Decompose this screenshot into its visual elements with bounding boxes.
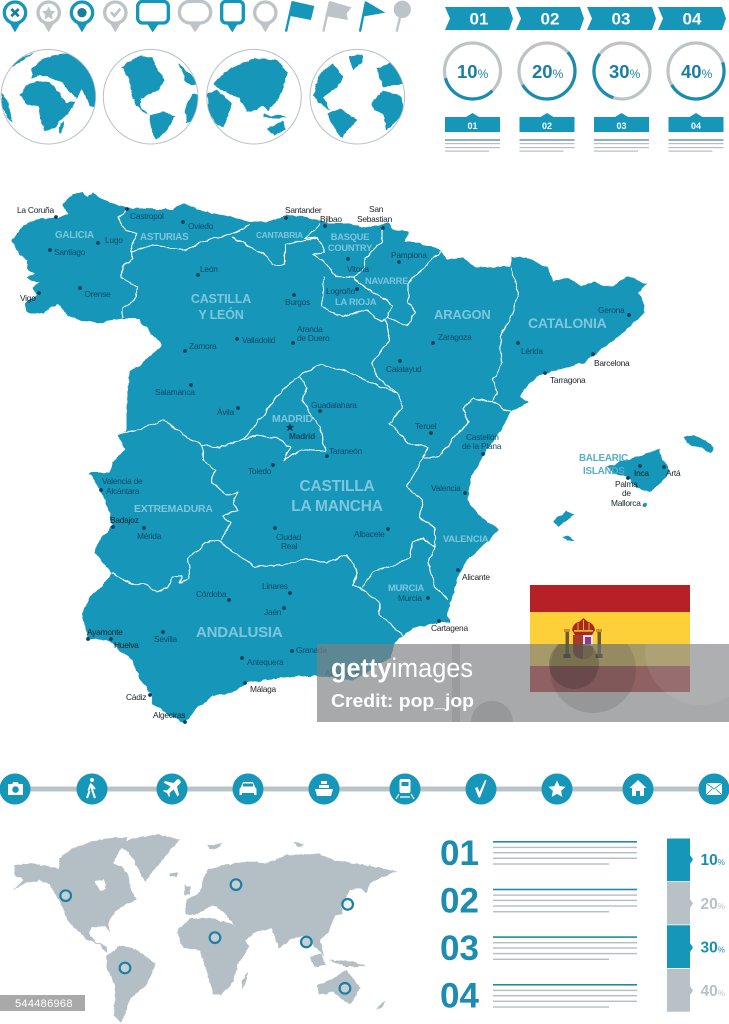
flag of Spain: [530, 585, 690, 692]
icon: grey flag: [323, 1, 352, 32]
image id tag: [0, 995, 85, 1011]
city names on land: Sevilla: [154, 634, 178, 644]
segment 30%: [667, 925, 725, 968]
region names: VALENCIA: [443, 534, 489, 544]
ring 40%: [661, 36, 729, 106]
tab 03: 03: [616, 121, 627, 131]
icon: star pin: [38, 2, 59, 32]
watermark banner: [317, 644, 729, 722]
tab 04: 04: [691, 121, 701, 131]
city names on land: Real: [281, 541, 298, 551]
city names on land: Lérida: [521, 346, 543, 356]
region names: [55, 230, 628, 641]
location rings: [60, 879, 353, 994]
globe: the Americas: [103, 49, 201, 144]
city names on land: Logroño: [326, 286, 356, 296]
ribbon 01: [445, 7, 513, 30]
icon: oval speech bubble: [179, 1, 211, 32]
ring 40%: 40%: [681, 61, 713, 82]
region names: COUNTRY: [328, 243, 373, 253]
city names on land: Lugo: [105, 235, 123, 245]
map of Spain: [12, 193, 713, 724]
city names on land: Vitoria: [347, 264, 369, 274]
city names on coast: Málaga: [250, 684, 277, 694]
city names on coast: Bilbao: [320, 214, 342, 224]
pin and marker icon row: [4, 1, 411, 32]
segment 30%: 30%: [700, 940, 725, 956]
icon: grey map pin: [394, 1, 411, 32]
icon: check mark: [466, 774, 496, 804]
city names on coast: Huelva: [114, 640, 139, 650]
region names: CATALONIA: [528, 315, 607, 331]
city names on land: Aranda: [297, 324, 323, 334]
region names: Y LEÓN: [198, 307, 244, 322]
region names: EXTREMADURA: [134, 504, 213, 515]
city names on coast: Cádiz: [126, 692, 146, 702]
city names on land: Teruel: [415, 421, 437, 431]
icon: blue flag: [286, 1, 314, 32]
city names on land: Oviedo: [188, 221, 214, 231]
region names: ARAGON: [434, 307, 491, 322]
city names on coast: Artá: [666, 468, 681, 478]
icon: square speech bubble: [222, 1, 243, 32]
segment 40%: 40%: [700, 983, 725, 1000]
ribbon 03: [587, 7, 656, 30]
icon timeline: [0, 774, 729, 804]
region names: ASTURIAS: [140, 232, 189, 243]
city names on land: de Duero: [297, 333, 330, 343]
icon: walking person: [76, 774, 108, 804]
city names on land: Orense: [84, 289, 111, 299]
city names on coast: Vigo: [20, 293, 36, 303]
icon: ship: [308, 774, 340, 804]
city names on land: Salamanca: [155, 387, 195, 397]
city names on coast: Sebastian: [357, 214, 393, 224]
region names: LA RIOJA: [335, 297, 377, 307]
city names on land: Almería: [325, 668, 353, 678]
item 04: 04: [440, 976, 479, 1016]
city names on land: Pamplona: [391, 250, 427, 260]
icon: empty pin: [255, 2, 276, 32]
city names on coast: de: [622, 488, 631, 498]
city names on land: Gerona: [598, 305, 625, 315]
Balearic islands: [553, 435, 713, 541]
percent ring charts: [433, 31, 729, 111]
ribbon 02: [516, 7, 584, 30]
city names on land: Linares: [262, 581, 288, 591]
globe: Asia and Australia: [207, 49, 301, 144]
icon: camera: [0, 774, 30, 804]
city names on coast: Mallorca: [611, 498, 641, 508]
item 03: 03: [440, 929, 479, 968]
item 02: 02: [440, 882, 479, 921]
icon: x pin: [4, 2, 26, 32]
ribbon 04: [658, 7, 726, 30]
region names: BALEARIC: [579, 453, 628, 464]
city names on coast: San: [369, 204, 384, 214]
city names on coast: Inca: [634, 468, 649, 478]
city names on land: de la Plana: [462, 441, 502, 451]
city names on land: Toledo: [248, 466, 272, 476]
city names on coast: Barcelona: [594, 358, 630, 368]
city names on land: Guadalahara: [311, 400, 357, 410]
ribbon 04: 04: [683, 10, 702, 28]
segment 20%: 20%: [700, 896, 725, 913]
region names: ANDALUSIA: [196, 624, 283, 641]
city names on land: Valladolid: [242, 335, 276, 345]
city names on land: Albacete: [354, 529, 385, 539]
segment 10%: 10%: [700, 852, 725, 869]
city names on land: Murcia: [398, 593, 422, 603]
city names on coast: Tarragona: [550, 375, 586, 385]
globe: Africa and Europe: [1, 49, 98, 144]
city names on land: Mérida: [137, 531, 162, 541]
city names on coast: Cartagena: [431, 623, 468, 633]
segment 20%: [667, 882, 725, 924]
ribbon 02: 02: [541, 10, 559, 28]
ring 30%: [587, 36, 657, 106]
city names on land: Calatayud: [386, 364, 422, 374]
icon: rectangular speech bubble: [138, 1, 168, 32]
icon: house: [622, 774, 654, 804]
city names on land: Ávila: [217, 407, 234, 417]
city names on land: Taraneón: [329, 446, 363, 456]
icon: dot pin: [71, 2, 93, 32]
region names: ISLANDS: [583, 466, 625, 477]
world map: [13, 834, 397, 1022]
region names: LA MANCHA: [291, 498, 383, 515]
mainland silhouette: [12, 193, 647, 722]
city names on land: Antequera: [247, 657, 284, 667]
city names on coast: [17, 204, 681, 720]
city names on coast: Alicante: [462, 572, 490, 582]
segment 40%: [667, 969, 725, 1012]
ribbon 01: 01: [470, 10, 488, 28]
ring 10%: 10%: [457, 61, 489, 82]
city names on coast: La Coruña: [17, 205, 54, 215]
small numbered tabs with text lines: [445, 113, 724, 152]
city names on land: Granada: [296, 645, 327, 655]
four globes: [1, 49, 405, 144]
icon: car: [232, 774, 264, 804]
city names on land: Castropol: [130, 211, 164, 221]
city names on land: [54, 211, 625, 678]
stacked percent bar: [667, 838, 725, 1012]
ring 20%: 20%: [532, 61, 564, 82]
icon: star: [542, 774, 572, 804]
chevron number ribbons: [445, 7, 726, 30]
item 01: 01: [440, 834, 479, 873]
city names on land: León: [200, 264, 218, 274]
image id tag: 544486968: [15, 998, 73, 1010]
city names on land: Alcántara: [106, 486, 140, 496]
region names: MURCIA: [388, 583, 424, 593]
globe: Atlantic view: [310, 49, 405, 144]
city names on land: Santiago: [54, 247, 86, 257]
continents: [13, 834, 397, 1022]
city names on coast: Badajoz: [110, 515, 139, 525]
segment 10%: [667, 838, 725, 881]
city names on land: Zaragoza: [438, 332, 472, 342]
icon: airplane: [156, 774, 188, 804]
regional border lines: [113, 208, 518, 635]
city names on land: Valencia de: [102, 476, 143, 486]
tab 01: [445, 113, 500, 152]
tab 04: [668, 113, 724, 152]
getty logo text: gettyimages: [331, 653, 473, 683]
city names on land: Castellón: [466, 432, 499, 442]
tab 03: [594, 113, 649, 152]
city names on land: Córdoba: [196, 589, 227, 599]
city dots: [37, 207, 666, 724]
region names: CASTILLA: [191, 292, 251, 306]
land and regional borders: [12, 193, 713, 722]
coat of arms: [564, 618, 602, 659]
city names on land: Madrid: [289, 431, 315, 441]
ring 10%: [433, 31, 512, 111]
city names on coast: Palma: [615, 479, 638, 489]
region names: GALICIA: [55, 230, 94, 241]
numbered list: [440, 834, 637, 1016]
ring 20%: [507, 31, 587, 111]
city names on land: Burgos: [285, 297, 310, 307]
icon: blue pennant: [360, 1, 385, 32]
icon: envelope: [698, 774, 729, 804]
city names on coast: Ayamonte: [87, 627, 123, 637]
ribbon 03: 03: [612, 10, 630, 28]
city names on land: Jaén: [264, 607, 282, 617]
city names on land: Valencia: [431, 483, 461, 493]
tab 01: 01: [467, 121, 478, 131]
region names: BASQUE: [331, 232, 369, 242]
credit text: Credit: pop_jop: [331, 690, 474, 711]
tab 02: [520, 113, 574, 152]
region names: CASTILLA: [299, 478, 375, 495]
icon: train: [390, 774, 420, 804]
tab 02: 02: [542, 121, 552, 131]
region names: CANTABRIA: [256, 230, 303, 240]
region names: NAVARRE: [365, 276, 408, 286]
city names on land: Ciudad: [276, 532, 302, 542]
region names: MADRID: [272, 413, 313, 425]
city names on coast: Santander: [285, 205, 322, 215]
city names on land: Zamora: [189, 341, 217, 351]
city names on coast: Algeciras: [153, 710, 185, 720]
ring 30%: 30%: [609, 61, 641, 82]
icon: check pin: [105, 2, 126, 32]
